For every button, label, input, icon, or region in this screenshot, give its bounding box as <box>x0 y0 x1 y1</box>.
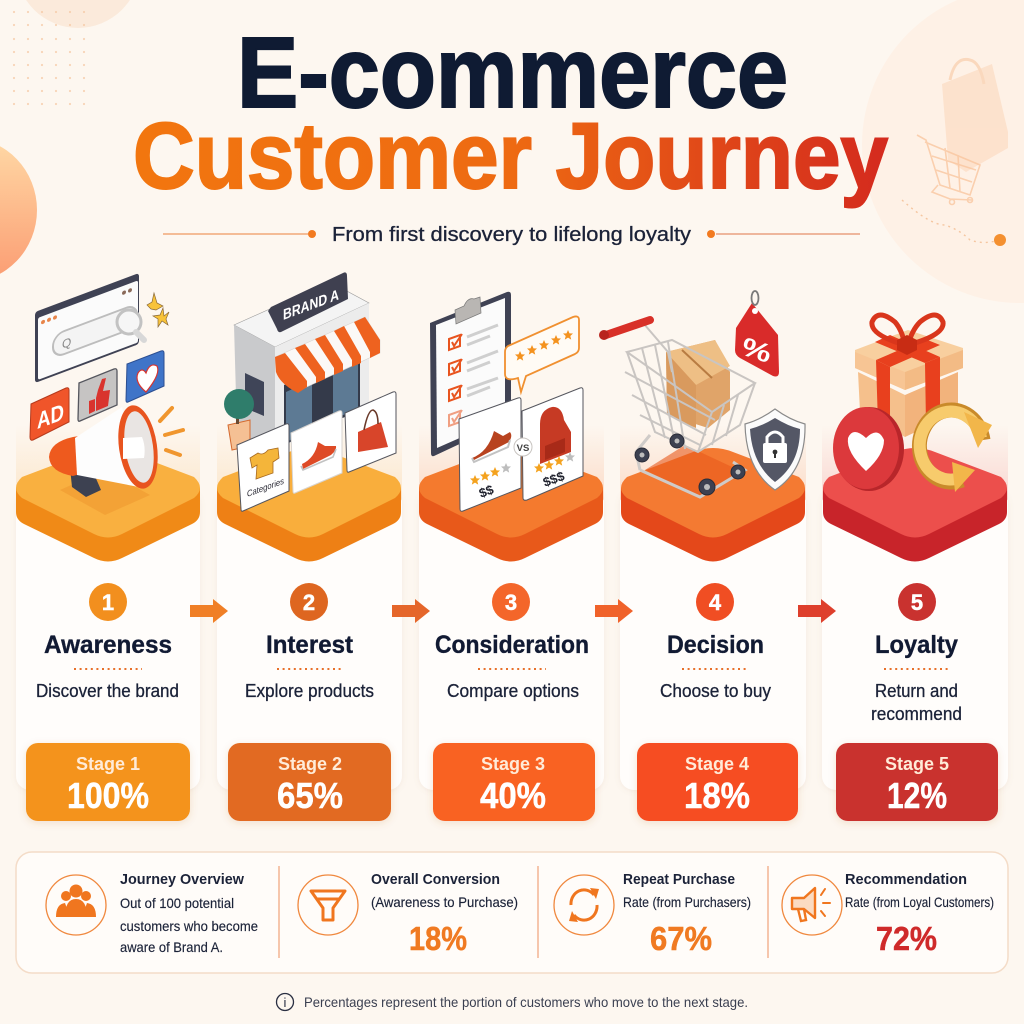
platform 5 <box>823 448 1007 562</box>
summary: recommendation: Rate (from Loyal Customers) <box>845 894 994 910</box>
number badge 1 <box>89 583 127 621</box>
text: description: Choose to buy <box>660 681 771 701</box>
bow <box>872 315 943 345</box>
panel: stage 3 consideration <box>419 292 604 821</box>
arrow 4 <box>798 599 836 623</box>
card: categories shirt: Categories <box>247 476 284 499</box>
metric box 1: 100% <box>67 775 149 816</box>
card: backpack comparison <box>522 388 583 500</box>
heading: Awareness: Awareness <box>44 631 172 659</box>
number badge 3: 3 <box>505 590 517 615</box>
panel: stage 5 loyalty <box>822 315 1008 821</box>
number badge 4 <box>696 583 734 621</box>
panel: stage 2 interest <box>217 272 402 821</box>
summary: repeat purchase <box>554 871 751 957</box>
heading: Consideration: Consideration <box>435 631 589 659</box>
metric box 5 <box>836 743 998 821</box>
metric box 1 <box>26 743 190 821</box>
summary: recommendation: 72% <box>876 920 937 957</box>
metric box 5: Stage 5 <box>885 754 949 774</box>
text: description: Compare options <box>447 681 579 701</box>
title line 2: Customer Journey <box>133 103 888 208</box>
icon: storefront <box>234 272 380 450</box>
subtitle: From first discovery to lifelong loyalty <box>332 224 691 246</box>
icon: discount tag <box>735 291 779 376</box>
card: handbag <box>345 392 396 472</box>
summary: overall conversion: Overall Conversion <box>371 871 500 888</box>
metric box 4 <box>637 743 798 821</box>
icon: heart medallion <box>833 407 904 491</box>
summary: repeat purchase: 67% <box>650 920 712 957</box>
summary: overall conversion: (Awareness to Purchase) <box>371 894 518 910</box>
decorative circle: top left <box>16 0 140 28</box>
metric box 3: 40% <box>480 775 546 816</box>
metric box 4: Stage 4 <box>685 754 749 774</box>
faded shopping bag <box>942 59 1008 172</box>
number badge 2: 2 <box>303 590 315 615</box>
text: description <box>871 681 962 724</box>
text: description: Return and <box>875 681 958 701</box>
summary: repeat purchase: Rate (from Purchasers) <box>623 894 751 910</box>
summary: journey overview: aware of Brand A. <box>120 939 223 955</box>
text: description: recommend <box>871 704 962 724</box>
faded shopping cart <box>917 135 980 204</box>
icon: megaphone outline <box>782 875 842 935</box>
metric box 4: 18% <box>684 775 750 816</box>
summary: repeat purchase: Repeat Purchase <box>623 871 735 888</box>
icon: AD tile: AD <box>37 400 64 435</box>
footnote: Percentages represent the portion of customers who move to the next stage. <box>304 994 748 1010</box>
icon: heart tile <box>126 351 164 402</box>
metric box 3: Stage 3 <box>481 754 545 774</box>
sign <box>268 272 348 332</box>
platform 2 <box>217 448 401 562</box>
icon: thumbs up tile <box>78 369 117 421</box>
icon: gift box <box>855 315 963 437</box>
icon: browser search window: Q <box>62 335 72 352</box>
awning <box>275 317 380 393</box>
icon: megaphone <box>49 403 183 515</box>
icon: sparkles <box>147 293 169 327</box>
heading: Interest: Interest <box>266 631 354 659</box>
card: backpack comparison: $$$ <box>541 468 567 490</box>
metric box 2: 65% <box>277 775 343 816</box>
card: shoe <box>291 411 342 493</box>
summary: journey overview <box>46 871 258 955</box>
card: categories shirt <box>237 424 289 511</box>
title <box>133 17 888 208</box>
icon: browser search window <box>35 273 144 383</box>
arrow 2 <box>392 599 430 623</box>
icon: gold loop arrows <box>919 410 992 492</box>
number badge 3 <box>492 583 530 621</box>
arrow 3 <box>595 599 633 623</box>
number badge 5: 5 <box>911 590 923 615</box>
icon: clipboard checklist <box>430 292 511 456</box>
icon: discount tag: % <box>738 331 776 369</box>
heading: Loyalty: Loyalty <box>875 631 958 659</box>
summary: journey overview: Journey Overview <box>120 871 244 888</box>
summary: overall conversion <box>298 871 518 957</box>
vs badge: VS <box>517 443 529 454</box>
card: shoe comparison: $$ <box>477 482 496 501</box>
wheels <box>635 434 745 495</box>
platform 4 <box>621 448 805 562</box>
icon: star rating speech bubble <box>505 316 579 392</box>
summary: recommendation <box>782 871 994 957</box>
icon: shopping cart with box <box>599 320 755 497</box>
metric box 2 <box>228 743 391 821</box>
summary: journey overview: customers who become <box>120 918 258 934</box>
panel: stage 4 decision <box>599 291 806 821</box>
faded dotted path with dot <box>902 200 1006 246</box>
number badge 4: 4 <box>709 590 722 615</box>
summary: recommendation: Recommendation <box>845 871 967 888</box>
title line 1: E-commerce <box>237 17 788 129</box>
icon: funnel <box>298 875 358 935</box>
summary: overall conversion: 18% <box>409 920 467 957</box>
metric box 2: Stage 2 <box>278 754 342 774</box>
icon: AD tile <box>30 388 69 440</box>
footnote: i <box>284 995 287 1010</box>
text: description: Explore products <box>245 681 374 701</box>
summary: journey overview: Out of 100 potential <box>120 895 234 911</box>
icon: refresh <box>554 875 614 935</box>
text: description: Discover the brand <box>36 681 179 701</box>
decorative circle: right <box>862 0 1024 303</box>
decorative circle: left <box>0 138 37 282</box>
icon: security shield <box>745 409 805 490</box>
platform 3 <box>419 448 603 562</box>
sign: BRAND A <box>283 287 339 324</box>
number badge 2 <box>290 583 328 621</box>
metric box 5: 12% <box>887 775 947 816</box>
panel: stage 1 awareness <box>16 273 200 821</box>
card: shoe comparison <box>459 398 521 511</box>
metric box 3 <box>433 743 595 821</box>
number badge 1: 1 <box>102 590 114 615</box>
icon: people <box>46 875 106 935</box>
platform 1 <box>16 448 200 562</box>
icon: potted plant <box>224 389 254 450</box>
number badge 5 <box>898 583 936 621</box>
vs badge <box>514 438 532 456</box>
decorative dot grid <box>13 11 85 105</box>
arrow 1 <box>190 599 228 623</box>
metric box 1: Stage 1 <box>76 754 140 774</box>
heading: Decision: Decision <box>667 631 764 659</box>
panel: journey summary <box>16 852 1008 973</box>
subtitle <box>163 224 860 246</box>
